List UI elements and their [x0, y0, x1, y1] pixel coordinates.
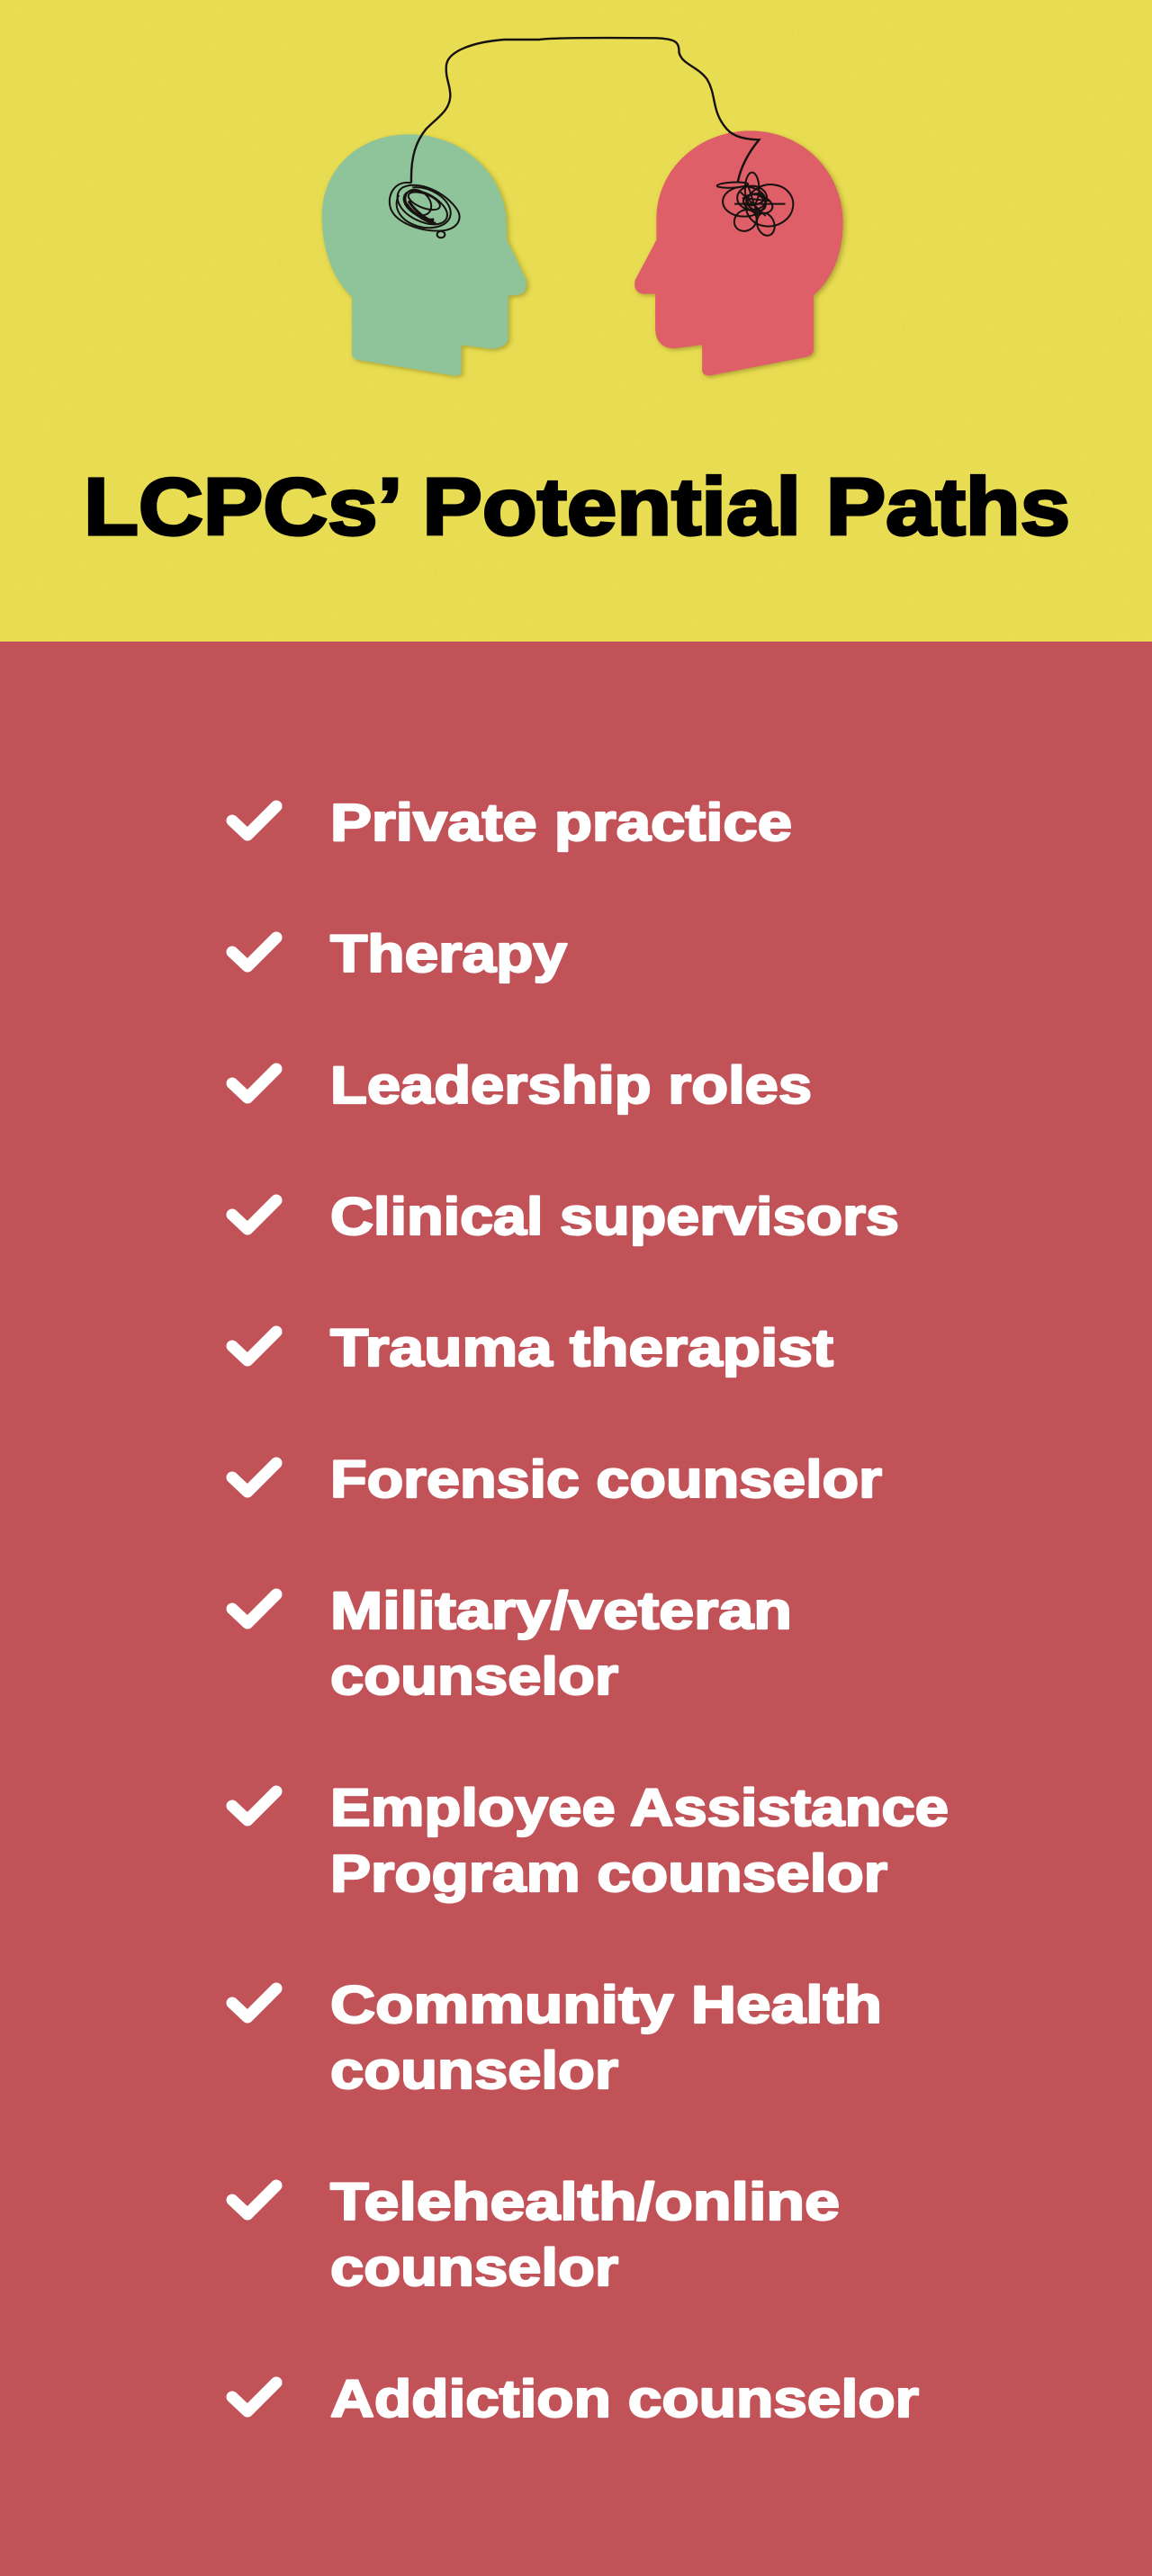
panel: red list background	[0, 642, 1152, 2576]
list item: Private practice: Private practice	[330, 794, 792, 852]
list item: Addiction counselor: Addiction counselor	[330, 2370, 919, 2428]
list item: Trauma therapist	[232, 1319, 833, 1378]
list item: Forensic counselor: Forensic counselor	[330, 1450, 882, 1509]
list item: Military/veteran counselor: counselor	[330, 1647, 618, 1706]
list item: Employee Assistance Program counselor: Program counselor	[330, 1844, 887, 1903]
list item: Community Health counselor: Community Health	[330, 1976, 882, 2034]
icon: green head	[322, 134, 526, 375]
list item: Private practice	[232, 794, 792, 852]
list item: Telehealth/online counselor	[232, 2173, 840, 2297]
list item: Telehealth/online counselor: counselor	[330, 2239, 618, 2297]
illustration: two heads joined by a tangled string	[322, 38, 843, 375]
list item: Clinical supervisors: Clinical supervisors	[330, 1188, 899, 1246]
list item: Therapy	[232, 925, 567, 983]
list item: Community Health counselor: counselor	[330, 2042, 618, 2100]
header paper texture	[0, 0, 1152, 642]
icon: red head	[634, 130, 843, 375]
icon: connecting string	[411, 38, 759, 183]
list item: Community Health counselor	[232, 1976, 882, 2100]
icon: red head scribble	[716, 173, 797, 237]
title: LCPCs’ Potential Paths	[84, 462, 1070, 552]
panel: yellow header background	[0, 0, 1152, 642]
list item: Employee Assistance Program counselor: Employee Assistance	[330, 1779, 949, 1837]
list item: Trauma therapist: Trauma therapist	[330, 1319, 833, 1378]
list item: Telehealth/online counselor: Telehealth/online	[330, 2173, 840, 2231]
list item: Employee Assistance Program counselor	[232, 1779, 949, 1903]
list item: Therapy: Therapy	[330, 925, 567, 983]
list item: Military/veteran counselor: Military/veteran	[330, 1582, 792, 1640]
list item: Leadership roles: Leadership roles	[330, 1056, 812, 1115]
list item: Military/veteran counselor	[232, 1582, 792, 1706]
icon: green head scribble	[390, 183, 460, 238]
